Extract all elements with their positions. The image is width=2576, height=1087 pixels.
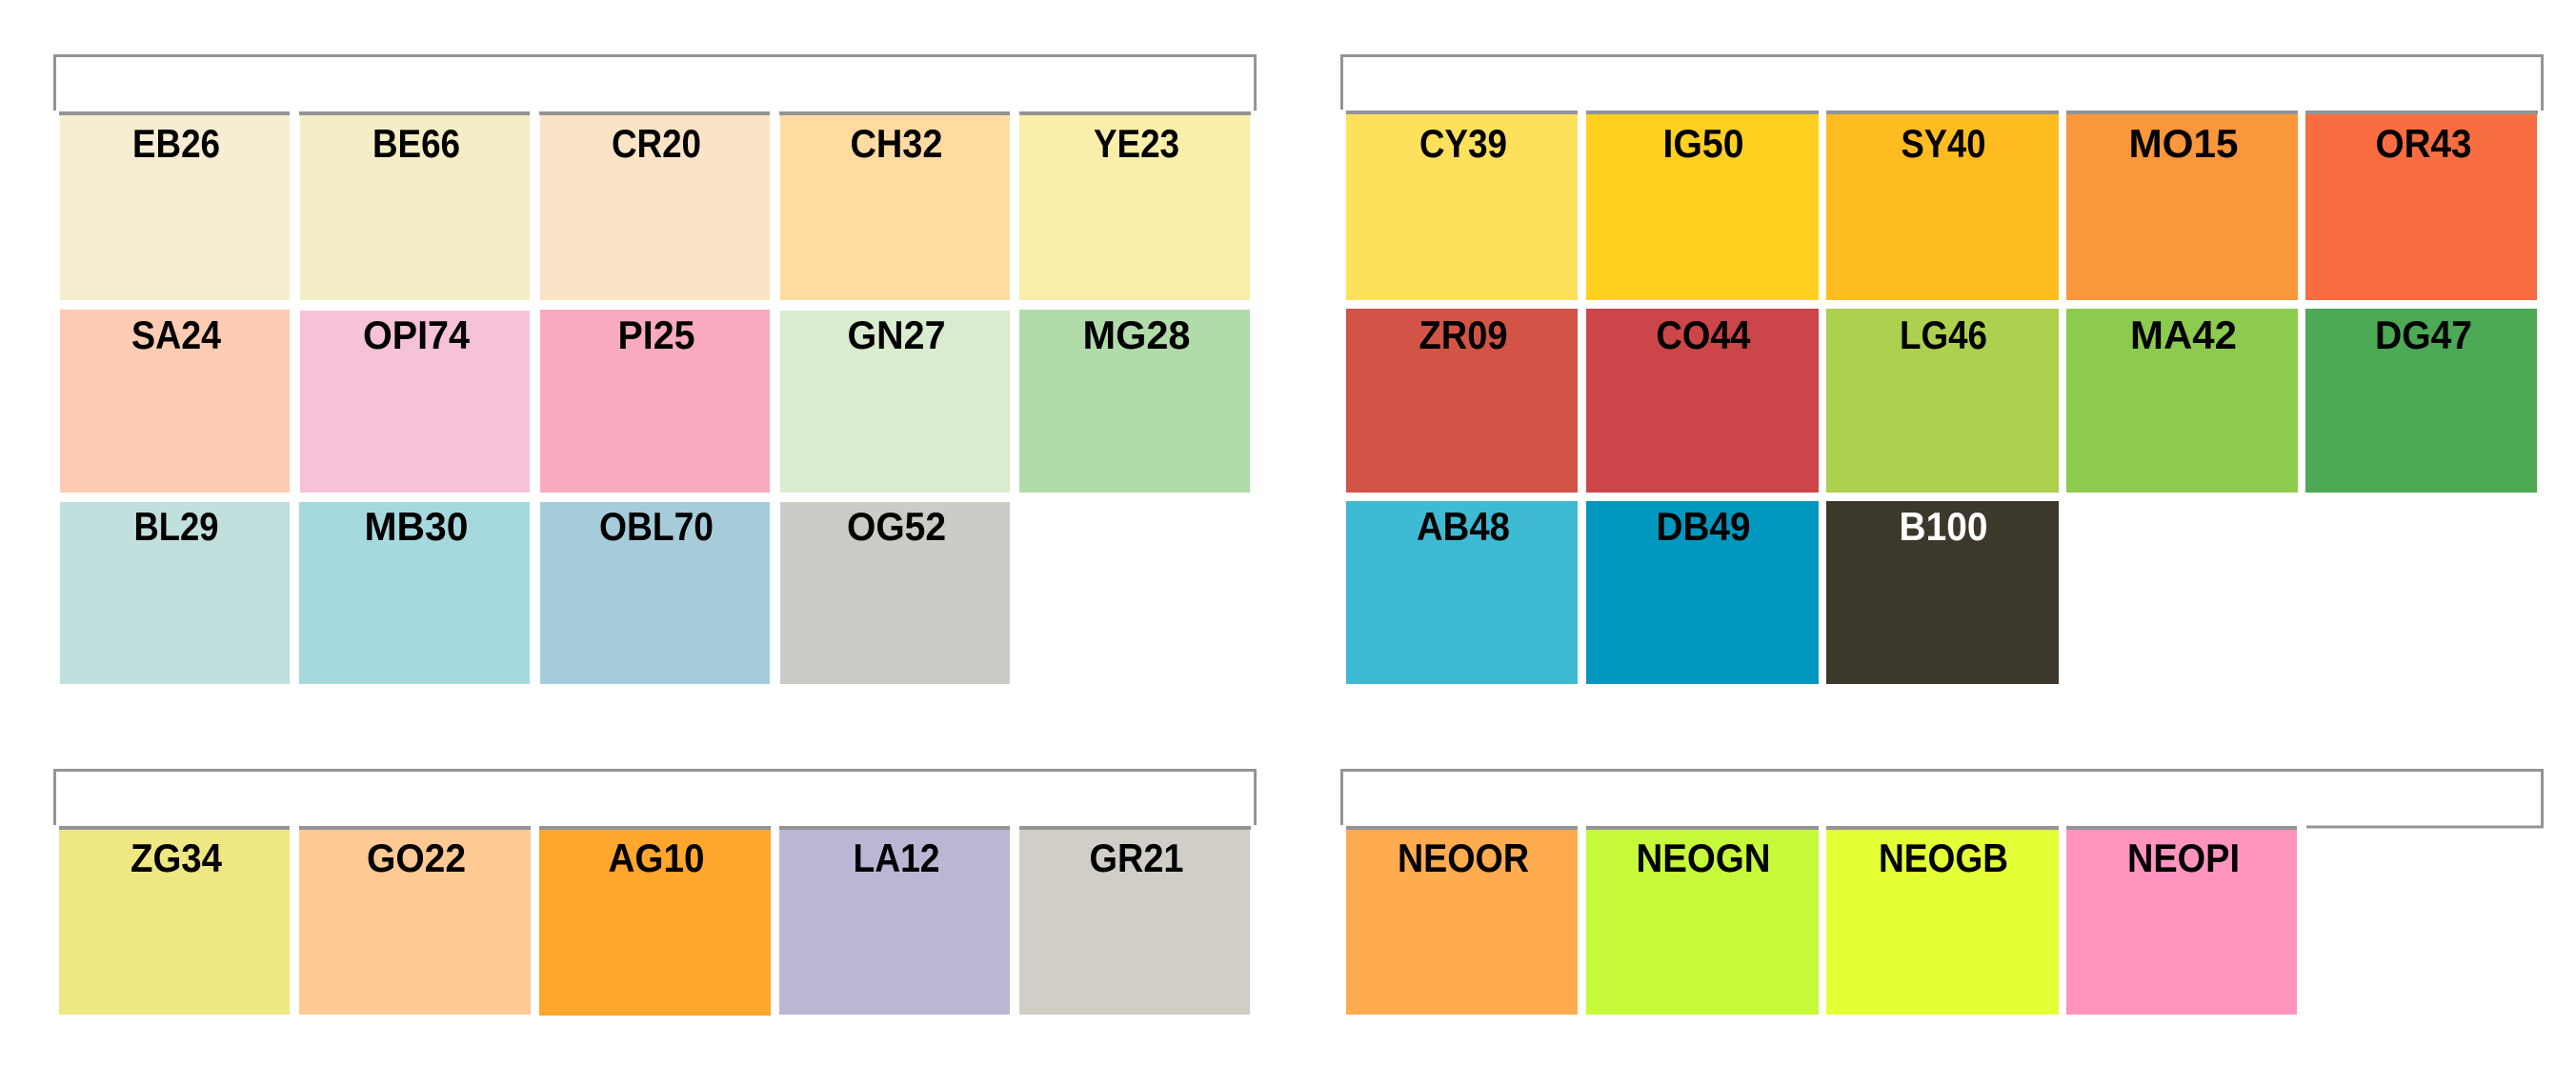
swatch CY39: CY39 (1419, 121, 1507, 166)
swatch MG28 (1019, 310, 1250, 493)
swatch DG47: DG47 (2375, 312, 2472, 357)
empty heading frame: top-right (1341, 55, 2542, 111)
swatch NEOGB (1826, 826, 2059, 1015)
swatch LG46 (1826, 309, 2059, 493)
swatch OR43: OR43 (2376, 121, 2471, 166)
swatch MB30 (299, 502, 530, 684)
swatch AB48: AB48 (1417, 504, 1510, 549)
swatch NEOGN (1586, 826, 1819, 1015)
swatch MG28: MG28 (1082, 312, 1191, 357)
swatch ZR09: ZR09 (1419, 312, 1507, 357)
swatch MB30: MB30 (364, 504, 469, 549)
swatch BL29: BL29 (133, 504, 219, 549)
swatch LA12 (779, 826, 1010, 1015)
swatch MO15 (2066, 111, 2298, 300)
swatch OBL70 (540, 502, 770, 684)
swatch YE23: YE23 (1094, 121, 1179, 166)
swatch LA12: LA12 (854, 835, 939, 880)
swatch ZG34 (59, 826, 290, 1015)
swatch CR20 (539, 111, 770, 300)
swatch MO15: MO15 (2128, 121, 2239, 166)
swatch DB49 (1586, 501, 1819, 684)
swatch PI25: PI25 (617, 312, 695, 357)
swatch NEOGB: NEOGB (1879, 835, 2008, 880)
swatch LG46: LG46 (1900, 312, 1987, 357)
swatch NEOPI (2066, 826, 2297, 1015)
swatch SY40 (1826, 111, 2059, 300)
swatch OPI74: OPI74 (363, 312, 471, 357)
swatch GR21 (1019, 826, 1251, 1015)
panel: bottom-left swatch group (55, 770, 1256, 1016)
panel: top-right swatch group (1341, 55, 2542, 684)
empty heading frame: top-left (55, 55, 1256, 111)
swatch OPI74 (300, 311, 530, 493)
swatch NEOGN: NEOGN (1637, 835, 1770, 880)
swatch CR20: CR20 (612, 121, 701, 166)
swatch SY40: SY40 (1902, 121, 1985, 166)
swatch SA24 (60, 310, 290, 493)
swatch NEOOR: NEOOR (1398, 835, 1529, 880)
swatch AB48 (1346, 501, 1578, 684)
swatch GO22 (299, 826, 531, 1015)
swatch NEOPI: NEOPI (2127, 835, 2240, 880)
swatch ZG34: ZG34 (131, 835, 223, 880)
empty heading frame: bottom-right (1341, 770, 2542, 827)
swatch EB26 (59, 111, 290, 300)
swatch GN27: GN27 (848, 312, 945, 357)
swatch AG10: AG10 (608, 835, 705, 880)
swatch DG47 (2305, 309, 2537, 493)
swatch GR21: GR21 (1090, 835, 1183, 880)
swatch AG10 (539, 826, 771, 1016)
swatch IG50: IG50 (1663, 121, 1743, 166)
swatch OR43 (2305, 111, 2538, 300)
swatch CY39 (1346, 111, 1578, 300)
swatch BE66: BE66 (372, 121, 460, 166)
swatch CO44: CO44 (1656, 312, 1751, 357)
swatch B100 (1826, 501, 2059, 684)
swatch BL29 (60, 502, 290, 684)
empty heading frame: bottom-left (55, 770, 1256, 825)
swatch OG52: OG52 (847, 504, 946, 549)
swatch B100: B100 (1900, 504, 1987, 549)
swatch OG52 (780, 502, 1010, 684)
swatch YE23 (1019, 111, 1251, 300)
swatch MA42: MA42 (2130, 312, 2237, 357)
swatch MA42 (2066, 309, 2298, 493)
swatch CH32 (779, 111, 1010, 300)
panel: bottom-right swatch group (1341, 770, 2542, 1015)
swatch SA24: SA24 (131, 312, 222, 357)
swatch ZR09 (1346, 309, 1578, 493)
swatch GN27 (780, 311, 1010, 493)
swatch OBL70: OBL70 (599, 504, 714, 549)
swatch CH32: CH32 (850, 121, 943, 166)
swatch BE66 (299, 111, 530, 300)
swatch DB49: DB49 (1656, 504, 1751, 549)
swatch IG50 (1586, 111, 1819, 300)
swatch CO44 (1586, 309, 1819, 493)
swatch PI25 (540, 310, 770, 493)
swatch EB26: EB26 (132, 121, 220, 166)
swatch GO22: GO22 (367, 835, 466, 880)
panel: top-left swatch group (55, 55, 1256, 684)
swatch NEOOR (1346, 826, 1578, 1015)
